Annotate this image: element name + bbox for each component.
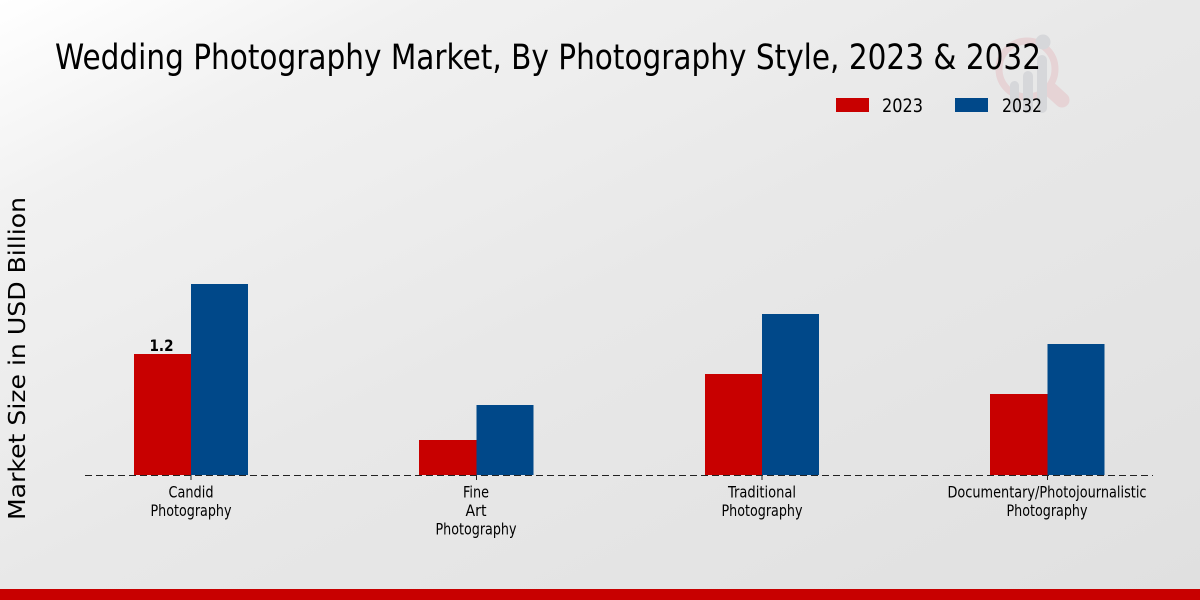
- icon: watermark magnifier logo: [999, 34, 1062, 113]
- legend: 2023: [836, 95, 923, 117]
- label: Fine Art Photography: [436, 482, 516, 538]
- label: Fine Art Photography: Art: [466, 501, 486, 520]
- label: Candid Photography: [150, 482, 232, 520]
- bar chart: [85, 284, 1153, 480]
- legend: 2032: 2032: [1002, 95, 1042, 117]
- label: Documentary/Photojournalistic Photography: [948, 482, 1146, 520]
- group: Candid Photography: [134, 284, 248, 475]
- label: Documentary/Photojournalistic Photography: Photography: [1006, 501, 1088, 520]
- label: Traditional Photography: Traditional: [727, 482, 796, 502]
- legend: 2023: 2023: [882, 95, 923, 117]
- label: Traditional Photography: Photography: [722, 501, 802, 520]
- x-axis baseline: [85, 475, 1153, 480]
- legend: 2032: [955, 95, 1042, 117]
- group: Traditional Photography: [705, 314, 819, 475]
- title: Wedding Photography Market, By Photography Style, 2023 & 2032: [55, 38, 1041, 78]
- footer bar: [0, 589, 1200, 600]
- legend: [836, 95, 1042, 117]
- label: Traditional Photography: [722, 482, 802, 520]
- label: Documentary/Photojournalistic Photography: Documentary/Photojournalistic: [948, 482, 1146, 502]
- label: Fine Art Photography: Photography: [436, 520, 516, 538]
- value label: 1.2: [150, 336, 174, 355]
- group: Fine Art Photography: [419, 405, 534, 475]
- label: Fine Art Photography: Fine: [463, 482, 489, 502]
- label: Candid Photography: Candid: [168, 482, 214, 502]
- y-axis label: Market Size in USD Billion: [3, 197, 31, 520]
- label: Candid Photography: Photography: [150, 501, 232, 520]
- x-axis labels: [150, 482, 1146, 538]
- group: Documentary/Photojournalistic Photography: [990, 344, 1104, 475]
